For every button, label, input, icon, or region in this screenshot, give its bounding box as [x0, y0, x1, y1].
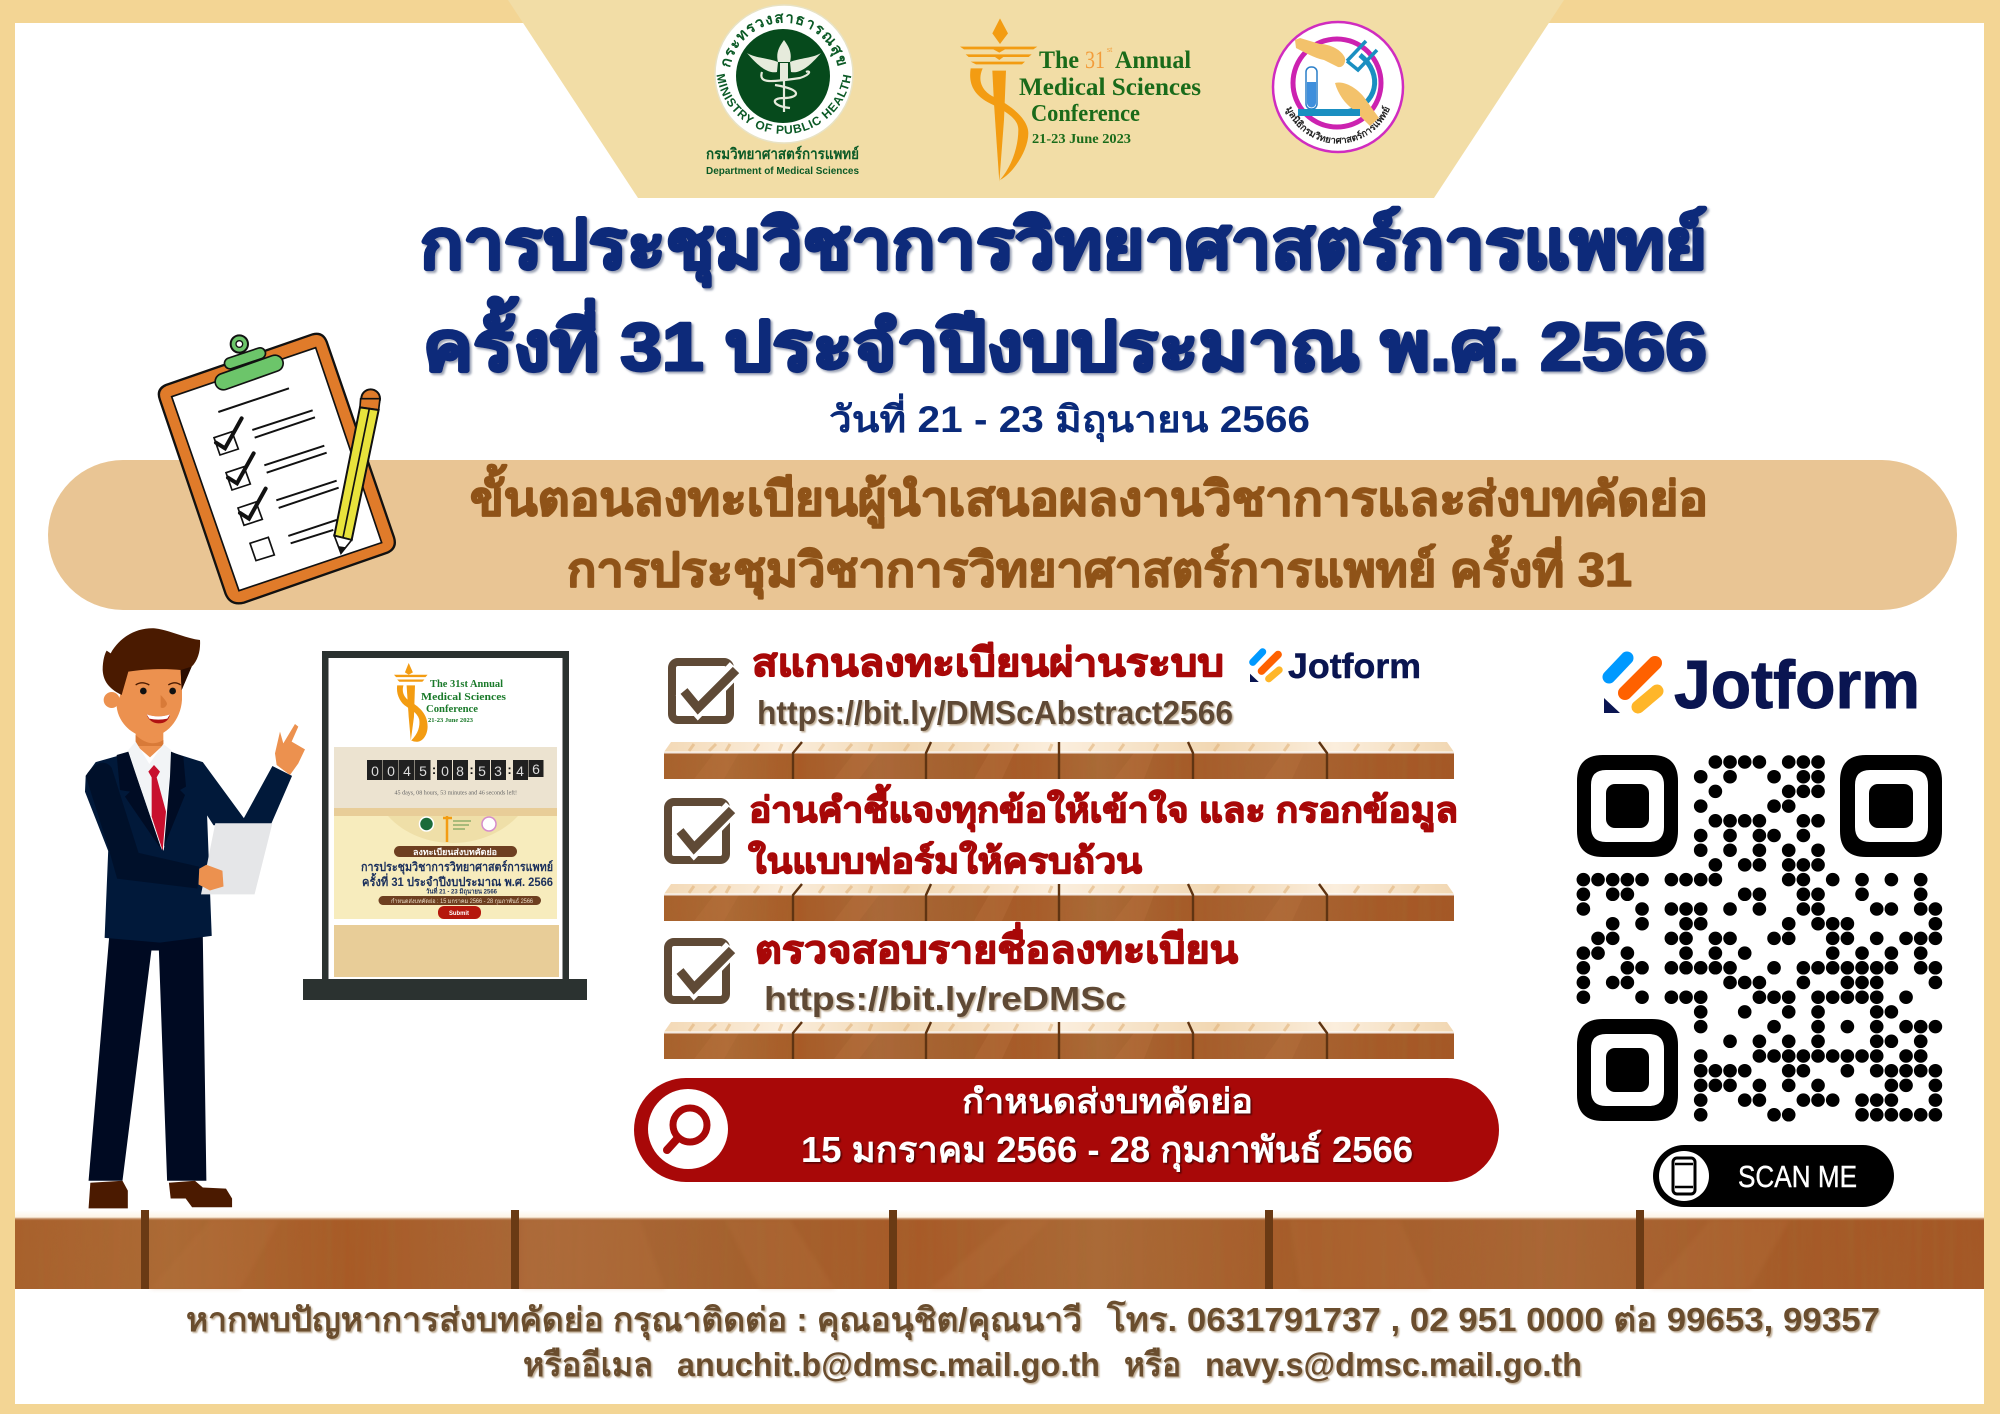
countdown timer: 0 — [371, 763, 379, 779]
shoes — [89, 1181, 232, 1208]
jacket — [85, 752, 292, 943]
contact footer: หรืออีเมล — [523, 1346, 653, 1383]
mini conference name — [421, 679, 506, 724]
ear and face — [104, 692, 120, 708]
website poster: ลงทะเบียนส่งบทคัดย่อ — [413, 847, 497, 857]
subtitle pill: การประชุมวิชาการวิทยาศาสตร์การแพทย์ ครั้งที่ 31 — [567, 535, 1632, 599]
mini conference name: Medical Sciences — [421, 692, 506, 703]
scan me badge — [1653, 1145, 1894, 1207]
logo: Ministry of Public Health — [706, 4, 859, 177]
logo: 31st Annual Medical Sciences Conference: 31 — [1085, 47, 1105, 74]
countdown timer: 0 — [387, 763, 395, 779]
mini conference name: 21-23 June 2023 — [428, 718, 473, 724]
countdown timer: : — [469, 762, 474, 777]
wood shelf 3 — [664, 1022, 1454, 1059]
step 2 — [668, 784, 1458, 881]
Jotform logo large: Jotform — [1674, 647, 1920, 723]
logo: Medical Sciences foundation — [1272, 20, 1404, 154]
logo: Medical Sciences foundation: มูลนิธิกรมวิทยาศาสตร์การแพทย์ — [1285, 104, 1390, 144]
deadline pill: 15 มกราคม 2566 - 28 กุมภาพันธ์ 2566 — [801, 1129, 1413, 1173]
logo: 31st Annual Medical Sciences Conference — [960, 18, 1201, 182]
website poster: การประชุมวิชาการวิทยาศาสตร์การแพทย์ — [361, 860, 553, 875]
mouth — [147, 714, 170, 723]
logo: Ministry of Public Health: กระทรวงสาธารณสุข — [722, 13, 846, 68]
wood shelf 1 — [664, 742, 1454, 779]
subtitle pill: ขั้นตอนลงทะเบียนผู้นำเสนอผลงานวิชาการและส่งบทคัดย่อ — [470, 464, 1708, 529]
logo: Ministry of Public Health: MINISTRY OF PUBLIC HEALTH — [716, 74, 852, 134]
wood floor — [15, 1210, 1984, 1289]
step 1: https://bit.ly/DMScAbstract2566 — [757, 694, 1233, 731]
logo: 31st Annual Medical Sciences Conference: The — [1039, 47, 1079, 74]
logo: Ministry of Public Health: Department of Medical Sciences — [706, 165, 859, 177]
trousers — [89, 936, 206, 1181]
step 3: https://bit.ly/reDMSc — [764, 980, 1126, 1017]
step 1: สแกนลงทะเบียนผ่านระบบ — [752, 642, 1224, 685]
illustration: businessman presenting — [85, 628, 305, 1208]
subtitle pill — [48, 460, 1957, 610]
countdown timer: 3 — [494, 763, 502, 779]
icon: magnifier — [648, 1089, 728, 1169]
header trapezoid banner — [508, 0, 1564, 198]
website poster — [303, 651, 587, 1000]
contact footer: หรือ — [1124, 1346, 1181, 1383]
left arm sleeve — [86, 763, 199, 888]
document — [201, 823, 272, 894]
countdown timer: 8 — [456, 763, 464, 779]
mini conference name: The 31st Annual — [430, 679, 503, 690]
logo: Ministry of Public Health: กรมวิทยาศาสตร์การแพทย์ — [706, 145, 859, 163]
step 3: ตรวจสอบรายชื่อลงทะเบียน — [755, 922, 1238, 972]
icon: checkbox — [668, 802, 732, 860]
title: การประชุมวิชาการวิทยาศาสตร์การแพทย์ — [420, 207, 1707, 287]
step 2: อ่านคำชี้แจงทุกข้อให้เข้าใจ และ กรอกข้อมูล — [749, 784, 1458, 832]
website poster: วันที่ 21 - 23 มิถุนายน 2566 — [426, 886, 497, 896]
eyes, brows and nose — [140, 688, 147, 694]
logo: 31st Annual Medical Sciences Conference: Annual — [1115, 47, 1191, 74]
icon: checkbox — [672, 662, 736, 720]
countdown timer: 5 — [419, 763, 427, 779]
website poster: 45 days, 08 hours, 53 minutes and 46 seconds left! — [394, 790, 517, 796]
step 1: Jotform — [1288, 647, 1421, 686]
step 2: ในแบบฟอร์มให้ครบถ้วน — [748, 840, 1142, 881]
step 3 — [668, 922, 1238, 1017]
step 1 — [672, 642, 1421, 731]
website poster: กำหนดส่งบทคัดย่อ : 15 มกราคม 2566 - 28 กุมภาพันธ์ 2566 — [391, 897, 534, 905]
website poster: ครั้งที่ 31 ประจำปีงบประมาณ พ.ศ. 2566 — [362, 872, 553, 889]
logo: 31st Annual Medical Sciences Conference: Conference — [1031, 101, 1140, 127]
countdown timer: 0 — [441, 763, 449, 779]
scan me badge: SCAN ME — [1738, 1159, 1857, 1194]
contact footer: anuchit.b@dmsc.mail.go.th — [677, 1346, 1100, 1383]
QR code — [1577, 755, 1942, 1121]
icon: Jotform small logo — [1250, 652, 1279, 682]
logo: 31st Annual Medical Sciences Conference: 21-23 June 2023 — [1032, 131, 1131, 146]
countdown timer: : — [432, 762, 436, 777]
tie — [148, 765, 166, 851]
pointing hand — [275, 724, 305, 775]
icon: clipboard with checklist and pencil — [159, 334, 395, 603]
countdown timer: 6 — [532, 761, 540, 777]
title: ครั้งที่ 31 ประจำปีงบประมาณ พ.ศ. 2566 — [423, 296, 1707, 385]
lapels — [117, 752, 186, 850]
conference date: วันที่ 21 - 23 มิถุนายน 2566 — [829, 393, 1310, 443]
mini conference name: Conference — [426, 704, 479, 715]
icon: checkbox — [668, 942, 732, 1000]
countdown timer — [367, 760, 544, 780]
logo: 31st Annual Medical Sciences Conference: Medical Sciences — [1019, 74, 1201, 101]
contact footer: navy.s@dmsc.mail.go.th — [1205, 1346, 1582, 1383]
countdown timer: 5 — [478, 763, 486, 779]
shirt — [128, 742, 171, 850]
title — [420, 207, 1707, 385]
wood shelf 2 — [664, 884, 1454, 921]
neck — [136, 727, 163, 757]
countdown timer: 4 — [403, 763, 411, 779]
contact footer — [186, 1300, 1880, 1383]
countdown timer: : — [507, 762, 512, 777]
website poster: Submit — [449, 911, 469, 917]
hand holding document — [199, 865, 224, 890]
contact footer: โทร. 0631791737 , 02 951 0000 ต่อ 99653, 99357 — [1106, 1300, 1880, 1338]
deadline pill — [634, 1078, 1499, 1182]
contact footer: หากพบปัญหาการส่งบทคัดย่อ กรุณาติดต่อ : คุณอนุชิต/คุณนาวี — [186, 1301, 1082, 1341]
hair — [103, 628, 200, 695]
mini conference logo — [394, 663, 428, 742]
logo: 31st Annual Medical Sciences Conference: st — [1107, 45, 1113, 54]
mini logos — [420, 816, 496, 842]
countdown timer: 4 — [516, 763, 524, 779]
deadline pill: กำหนดส่งบทคัดย่อ — [962, 1083, 1253, 1121]
